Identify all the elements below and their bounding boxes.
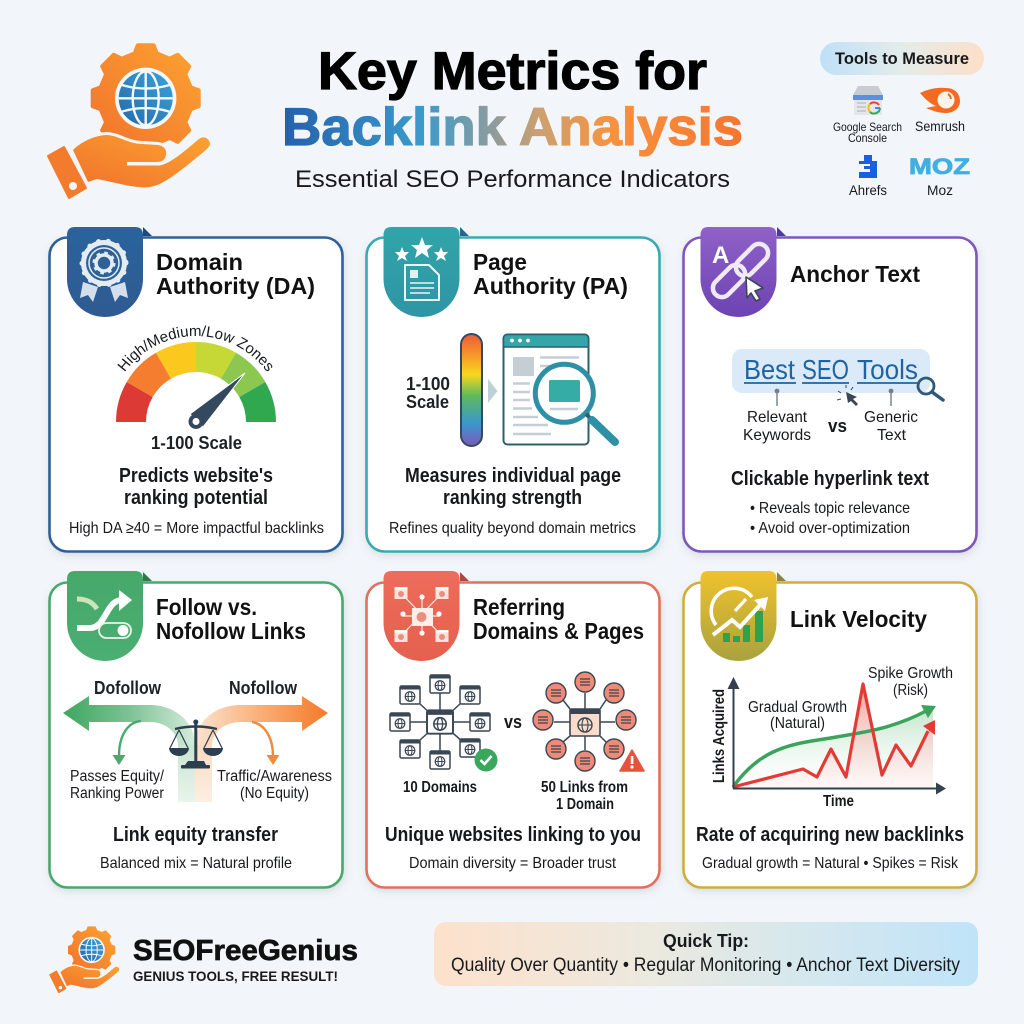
label: passes equity: Passes Equity/ — [70, 768, 165, 785]
label: relevant keywords: Relevant — [747, 409, 808, 426]
description — [405, 465, 621, 509]
icon: shuffle and toggle badge — [67, 571, 143, 661]
icon: Ahrefs — [859, 155, 877, 178]
icon: magnifier — [918, 378, 943, 400]
arrow: passes equity — [112, 721, 141, 765]
Ahrefs label: Ahrefs — [849, 182, 887, 198]
card frame — [366, 582, 660, 888]
gauge chart — [116, 326, 276, 429]
hyperlink example: Best — [744, 354, 795, 385]
label: nofollow: Nofollow — [229, 678, 298, 698]
callout pins — [775, 389, 893, 406]
label: generic text: Text — [877, 427, 907, 444]
title: Key Metrics for — [318, 42, 707, 101]
badge fold — [143, 572, 152, 581]
label: gradual growth: (Natural) — [770, 715, 825, 732]
badge fold — [460, 572, 469, 581]
panel: Anchor Text — [684, 227, 976, 552]
axes — [728, 677, 946, 794]
vs label: vs — [504, 712, 522, 732]
heading: Link Velocity — [790, 606, 927, 632]
panel: Referring Domains — [366, 571, 660, 888]
Google Search Console label: Google Search — [833, 120, 902, 134]
Google Search Console label — [833, 120, 902, 145]
description: Clickable hyperlink text — [731, 468, 929, 490]
icon: balance scales — [169, 720, 223, 768]
line: gradual growth — [733, 705, 936, 787]
icon: award rosette badge — [67, 227, 143, 317]
icon: stars and document badge — [384, 227, 460, 317]
subtitle: Essential SEO Performance Indicators — [295, 166, 730, 193]
description — [119, 465, 273, 509]
hyperlink example — [732, 349, 930, 393]
icon: click cursor — [837, 385, 858, 406]
note: High DA ≥40 = More impactful backlinks — [69, 520, 324, 537]
label: passes equity: Ranking Power — [70, 785, 164, 802]
description: Rate of acquiring new backlinks — [696, 824, 964, 846]
label: passes equity — [70, 768, 165, 802]
title: Backlink Analysis — [282, 98, 743, 157]
line chart — [728, 677, 946, 794]
label: relevant keywords: Keywords — [743, 427, 811, 444]
label: spike growth — [868, 665, 953, 699]
bullet list — [750, 500, 910, 537]
panel: Page Authority — [366, 227, 660, 552]
footer brand: SEOFreeGenius — [133, 935, 358, 967]
icon: Moz wordmark: MOZ — [909, 154, 970, 179]
description: Measures individual page — [405, 465, 621, 487]
heading: Follow vs. — [156, 594, 257, 620]
scale label — [406, 374, 450, 412]
hyperlink example: SEO — [802, 354, 849, 385]
icon: Semrush — [920, 88, 960, 113]
icon: green check — [474, 748, 498, 772]
rainbow scale bar — [461, 334, 482, 446]
scale label: Scale — [406, 392, 449, 412]
heading: Domain — [156, 249, 243, 275]
icon: Google Search Console — [853, 86, 883, 115]
footer brand: GENIUS TOOLS, FREE RESULT! — [133, 968, 338, 984]
heading — [156, 594, 306, 644]
label: generic text: Generic — [864, 409, 918, 426]
logo: hand holding gear and globe — [48, 45, 210, 198]
arrow: traffic — [252, 722, 280, 765]
callout: quick tip — [434, 922, 978, 986]
bullet list: • Avoid over-optimization — [750, 520, 910, 537]
line: spike growth — [733, 684, 935, 787]
label: 50 links — [541, 779, 628, 813]
diagram: one domain many links — [533, 672, 644, 771]
bullet list: • Reveals topic relevance — [750, 500, 910, 517]
heading — [473, 249, 628, 299]
note: Gradual growth = Natural • Spikes = Risk — [702, 855, 959, 872]
axis label: time: Time — [823, 793, 854, 810]
icon: link and cursor badge: A — [712, 242, 729, 269]
label: traffic awareness: Traffic/Awareness — [217, 768, 332, 785]
label: traffic awareness: (No Equity) — [240, 785, 309, 802]
arrow: nofollow — [195, 696, 328, 802]
badge fold — [777, 227, 786, 236]
badge fold — [777, 572, 786, 581]
label: 50 links: 1 Domain — [556, 796, 614, 813]
note: Balanced mix = Natural profile — [100, 855, 292, 872]
heading: Nofollow Links — [156, 618, 306, 644]
label: gradual growth: Gradual Growth — [748, 699, 847, 716]
gauge scale label: 1-100 Scale — [151, 433, 242, 453]
footer brand — [133, 935, 358, 984]
scale label: 1-100 — [406, 374, 450, 394]
panel: Link Velocity — [684, 571, 976, 888]
Google Search Console label: Console — [848, 131, 887, 145]
callout: quick tip: Quick Tip: — [663, 931, 749, 951]
heading — [473, 594, 644, 644]
icon: link and cursor badge — [700, 227, 776, 317]
label: 50 links: 50 Links from — [541, 779, 628, 796]
card frame — [50, 582, 342, 888]
vs label: vs — [828, 416, 847, 436]
description: Predicts website's — [119, 465, 273, 487]
description: Link equity transfer — [113, 824, 278, 846]
label: spike growth: (Risk) — [893, 682, 928, 699]
title — [282, 42, 743, 157]
area: natural growth — [733, 706, 933, 788]
badge fold — [143, 227, 152, 236]
callout: quick tip: Quality Over Quantity • Regular Monitoring • Anchor Text Diversity — [451, 955, 960, 976]
description: ranking strength — [443, 487, 582, 509]
label: gradual growth — [748, 699, 847, 732]
label: generic text — [864, 409, 918, 444]
description: ranking potential — [124, 487, 268, 509]
card frame — [50, 238, 342, 552]
note: Refines quality beyond domain metrics — [389, 520, 636, 537]
heading: Authority (PA) — [473, 273, 628, 299]
heading — [156, 249, 315, 299]
panel: Domain Authority — [47, 227, 347, 558]
icon: network badge — [384, 571, 460, 661]
card frame — [366, 238, 660, 552]
icon: speedometer and growth badge — [700, 571, 776, 661]
tools heading pill — [820, 42, 984, 75]
gauge needle — [188, 373, 245, 429]
diagram: many domains — [390, 675, 498, 772]
arrow: dofollow — [63, 696, 195, 802]
Semrush label: Semrush — [915, 118, 965, 134]
label: 10 domains: 10 Domains — [403, 779, 477, 796]
description: Unique websites linking to you — [385, 824, 641, 846]
label: relevant keywords — [743, 409, 811, 444]
card frame — [684, 238, 976, 552]
arrow — [488, 379, 498, 403]
browser page with magnifier — [504, 334, 615, 444]
panel: tools to measure — [820, 42, 984, 198]
footer logo icon — [50, 927, 119, 993]
note: Domain diversity = Broader trust — [409, 855, 616, 872]
label: spike growth: Spike Growth — [868, 665, 953, 682]
gauge zone label: High/Medium/Low Zones — [117, 326, 272, 372]
hyperlink example: Tools — [857, 354, 918, 385]
heading: Domains & Pages — [473, 618, 644, 644]
heading: Authority (DA) — [156, 273, 315, 299]
heading: Referring — [473, 594, 565, 620]
heading: Anchor Text — [790, 261, 920, 287]
tools heading pill: Tools to Measure — [835, 49, 969, 68]
icon: warning triangle — [620, 750, 644, 771]
card frame — [684, 582, 976, 888]
panel: Follow vs Nofollow — [50, 571, 342, 888]
axis label: links acquired: Links Acquired — [711, 689, 728, 783]
label: traffic awareness — [217, 768, 332, 802]
area: spike growth — [733, 684, 933, 788]
label: dofollow: Dofollow — [94, 678, 162, 698]
heading: Page — [473, 249, 527, 275]
Moz label: Moz — [927, 182, 953, 198]
badge fold — [460, 227, 469, 236]
